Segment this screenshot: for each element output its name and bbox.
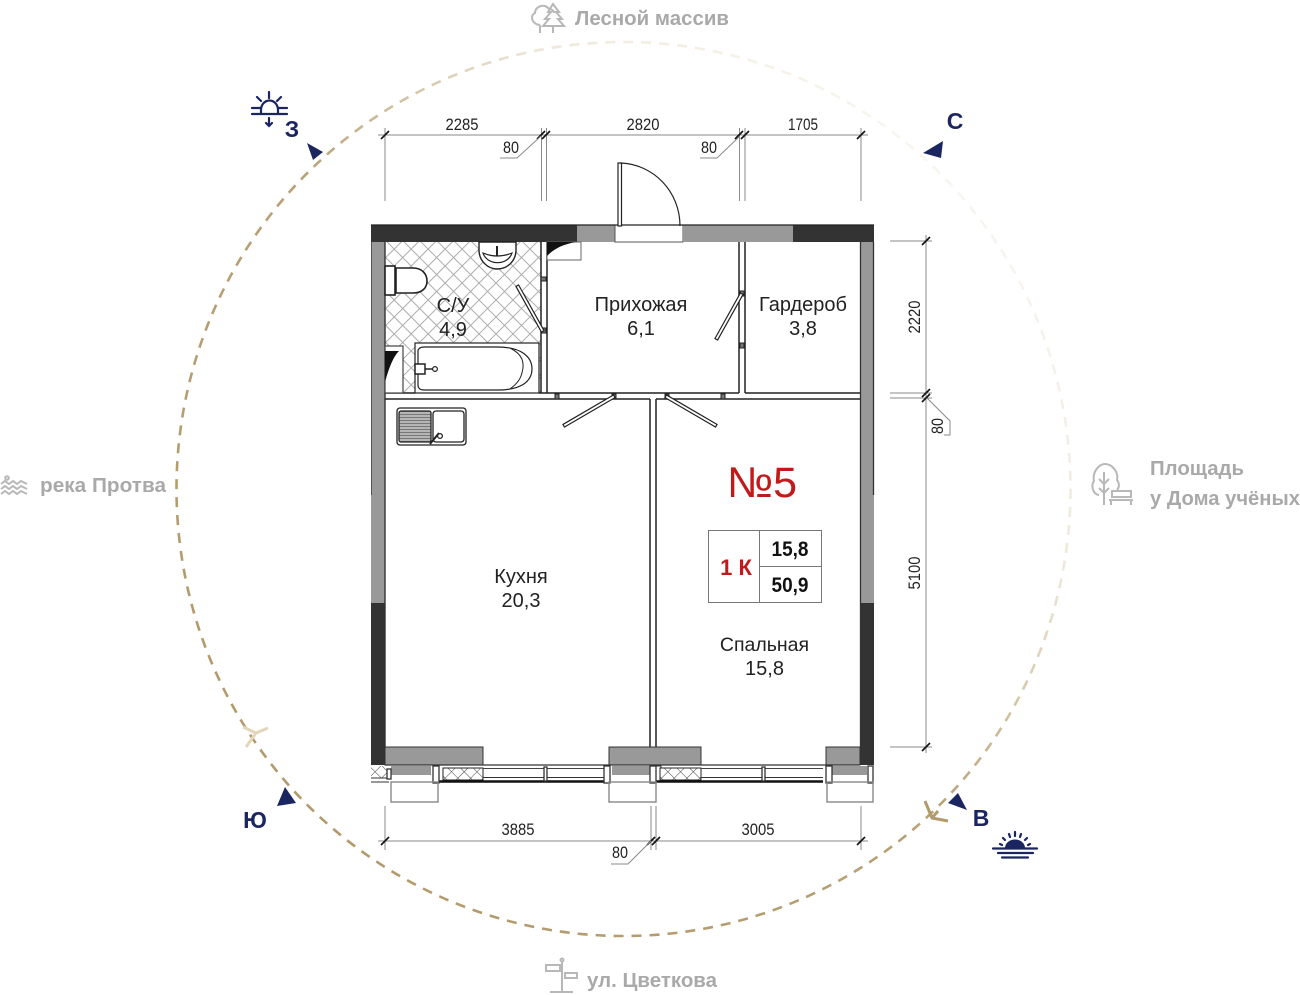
site: square xyxy=(1092,458,1300,510)
label: hallway: Прихожая xyxy=(595,294,687,316)
icon: sunset xyxy=(252,92,287,126)
compass: west xyxy=(252,92,323,160)
letter west: З xyxy=(285,116,299,142)
door posts xyxy=(541,277,744,399)
right dimensions xyxy=(890,235,950,753)
gold marker: southeast xyxy=(925,801,948,821)
icon: signpost xyxy=(546,958,577,992)
arrow south xyxy=(277,787,296,806)
label: Лесной массив xyxy=(575,8,729,30)
interior walls xyxy=(385,242,860,747)
gold marker: southwest xyxy=(243,727,268,747)
icon: tree and bench xyxy=(1092,464,1133,505)
kitchen sink xyxy=(397,408,466,445)
bathtub xyxy=(415,343,539,393)
label: kitchen: 20,3 xyxy=(502,590,540,612)
compass: north xyxy=(923,108,963,158)
bottom dimensions: 80 xyxy=(612,843,628,862)
site: river xyxy=(1,475,167,497)
label: hallway: 6,1 xyxy=(627,318,655,340)
letter east: В xyxy=(973,805,989,831)
floor plan xyxy=(371,115,950,864)
label: wardrobe: Гардероб xyxy=(759,294,847,316)
toilet xyxy=(385,266,427,295)
top dimensions: 2285 xyxy=(446,115,478,134)
top dimensions: 2820 xyxy=(626,115,660,134)
right dimensions: 5100 xyxy=(905,556,924,590)
label: kitchen: Кухня xyxy=(494,566,548,588)
label: bathroom: 4,9 xyxy=(439,319,467,341)
icon: sunrise xyxy=(993,832,1037,858)
label: bedroom: Спальная xyxy=(720,634,809,656)
outer walls xyxy=(371,225,874,765)
living area: 15,8 xyxy=(772,538,809,561)
total area: 50,9 xyxy=(772,574,808,597)
label: wardrobe: 3,8 xyxy=(789,318,817,340)
apartment type: 1 К xyxy=(720,555,752,580)
south wall and windows xyxy=(371,747,873,802)
site: street xyxy=(546,958,718,992)
arrow west xyxy=(307,143,323,160)
bottom dimensions xyxy=(378,806,868,864)
compass: south xyxy=(243,787,296,833)
right dimensions: 2220 xyxy=(905,300,924,334)
label: у Дома учёных xyxy=(1150,488,1300,510)
bottom dimensions: 3885 xyxy=(502,820,534,839)
letter north: С xyxy=(947,108,963,134)
letter south: Ю xyxy=(243,807,267,833)
apartment number: №5 xyxy=(727,459,797,507)
icon: trees xyxy=(532,4,564,33)
entrance door xyxy=(618,163,680,226)
compass: east xyxy=(948,793,1037,858)
label: Площадь xyxy=(1150,458,1244,480)
right dimensions: 80 xyxy=(928,418,947,434)
bathroom tile floor xyxy=(385,242,541,393)
area table xyxy=(708,530,822,602)
arrow east xyxy=(948,793,967,810)
label: ул. Цветкова xyxy=(587,970,718,992)
label: bedroom: 15,8 xyxy=(745,658,784,680)
top dimensions: 80 xyxy=(701,138,717,157)
ventilation shaft bathroom xyxy=(385,346,403,393)
label: bathroom: С/У xyxy=(437,295,469,317)
compass ring xyxy=(176,42,1070,936)
site: forest xyxy=(532,4,729,33)
top dimensions: 80 xyxy=(503,138,519,157)
washbasin xyxy=(479,242,516,269)
icon: water xyxy=(1,476,27,494)
arrow north xyxy=(923,141,943,158)
bottom dimensions: 3005 xyxy=(742,820,774,839)
top dimensions: 1705 xyxy=(788,115,818,134)
ventilation shaft hall xyxy=(547,242,581,260)
room labels xyxy=(437,294,847,680)
top dimensions xyxy=(378,115,868,201)
interior door leaves xyxy=(518,287,741,425)
label: река Протва xyxy=(40,475,167,497)
